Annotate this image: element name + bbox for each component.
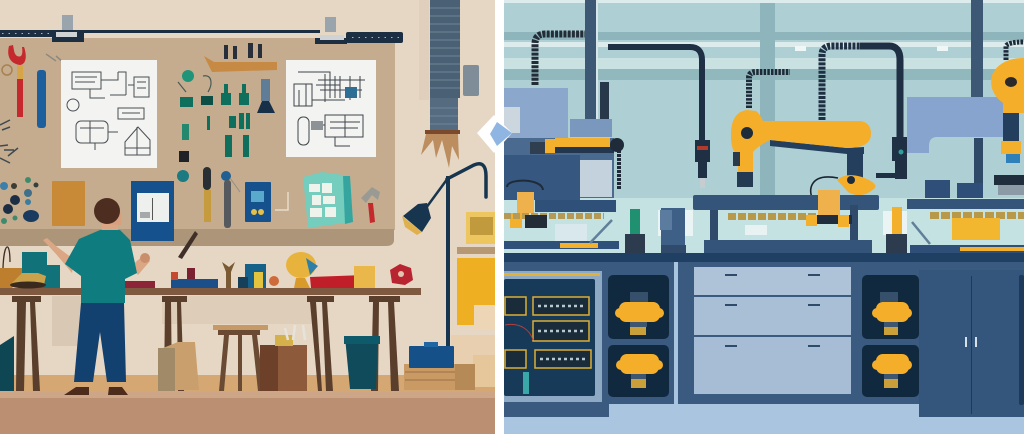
- tool: bench vise on wall: [257, 79, 275, 113]
- blueprint sheet right: [286, 60, 376, 157]
- cardboard boxes under bench: [158, 325, 307, 391]
- cabinet with yellow units left: [608, 275, 669, 397]
- crate stack: [404, 364, 475, 390]
- wall lamp: [402, 164, 486, 346]
- cabinet with yellow units right: [862, 275, 919, 397]
- hanging tool one: [608, 47, 710, 188]
- right machine housing: [907, 97, 1024, 253]
- tool: long spanner: [221, 171, 240, 228]
- person at bench: [43, 198, 150, 395]
- small coil cable: [749, 72, 790, 108]
- blue toolbox: [409, 342, 454, 368]
- left fixture rail: [504, 215, 619, 249]
- cable carrier and left machine: [504, 34, 624, 228]
- tool: pliers: [361, 187, 380, 223]
- wooden shelf with clamps: [204, 43, 277, 72]
- blue meter device: [245, 182, 271, 222]
- drawers: [694, 267, 851, 394]
- yellow filing cabinet and boxes: [451, 212, 495, 387]
- upright gauges: [625, 207, 907, 253]
- green component cluster: [178, 70, 250, 162]
- factory background structure: [504, 0, 1024, 253]
- blue clipboard: [131, 181, 174, 241]
- bead and screw collection: [0, 177, 39, 224]
- tool: screwdriver: [203, 167, 211, 222]
- double-door cabinet: [919, 270, 1024, 417]
- workbench: [0, 288, 421, 391]
- center work table: [693, 190, 879, 253]
- support columns: [585, 0, 983, 188]
- open control panel: [504, 271, 602, 402]
- yellow robot arm: [731, 110, 900, 196]
- panel: manual workshop: [0, 0, 495, 434]
- tool: red wrench: [2, 45, 26, 117]
- right yellow robot: [991, 42, 1024, 195]
- dark peg tool: [178, 231, 198, 259]
- blueprint sheet left: [61, 60, 157, 168]
- orange envelope: [52, 181, 85, 226]
- tool: blue bar: [37, 70, 46, 128]
- stool: [213, 325, 268, 391]
- pegboard: [0, 38, 395, 246]
- circuit modules: [505, 297, 591, 394]
- tool: round pin: [177, 170, 189, 182]
- panel: automated factory: [504, 0, 1024, 434]
- wall rail: [0, 15, 403, 44]
- ventilation duct: [421, 0, 479, 168]
- tall cable carrier to right tool: [822, 46, 907, 179]
- main counter: [504, 253, 1024, 434]
- small hardware left: [0, 54, 64, 163]
- divider: white centre band with diamond: [477, 0, 512, 434]
- teal map board: [303, 172, 353, 228]
- bench-top items: [0, 247, 413, 288]
- small fittings: [275, 192, 288, 210]
- bins: [0, 336, 380, 391]
